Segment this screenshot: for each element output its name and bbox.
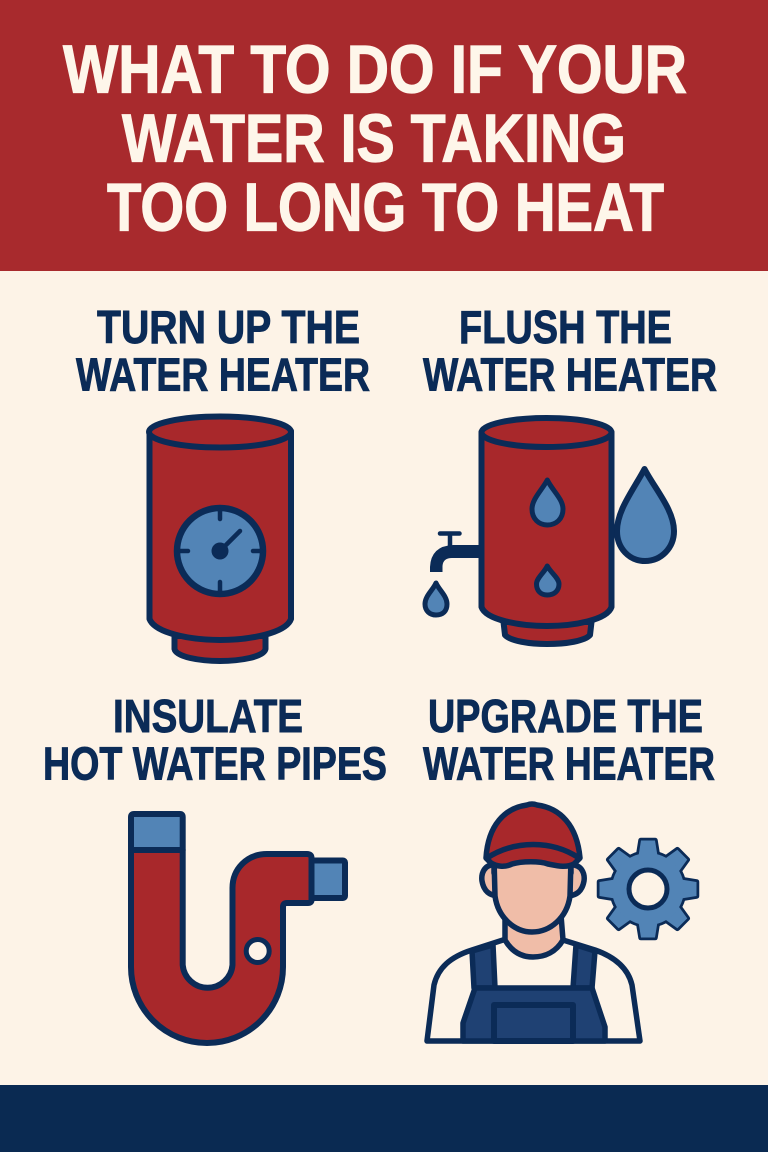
right pipe cap [311, 860, 345, 898]
heading: insulate hot water pipes: INSULATE [113, 690, 303, 742]
icon: upper drop [532, 480, 563, 525]
neck [505, 915, 563, 957]
ears [482, 865, 497, 896]
overalls [463, 945, 605, 1041]
pipe hole [246, 940, 269, 962]
icon: insulated pipe [131, 814, 345, 1043]
cap [486, 804, 580, 866]
icon: lower drop [536, 566, 559, 595]
heading: upgrade the water heater [423, 690, 715, 790]
heading: insulate hot water pipes: HOT WATER PIPES [43, 738, 387, 790]
ear tabs [494, 866, 571, 873]
title: WATER IS TAKING [122, 100, 626, 176]
icon: faucet [430, 534, 483, 572]
torso and shirt [427, 940, 640, 1041]
heading: flush the water heater [423, 301, 717, 400]
icon: gear [600, 840, 696, 938]
heading: turn up the water heater: WATER HEATER [76, 348, 370, 400]
icon: water heater being flushed [425, 418, 674, 644]
header banner [0, 0, 768, 271]
title: WHAT TO DO IF YOUR [63, 32, 687, 108]
heading: turn up the water heater [76, 301, 370, 400]
footer band [0, 1085, 768, 1152]
heading: upgrade the water heater: UPGRADE THE [428, 690, 703, 742]
icon: technician [427, 804, 640, 1041]
title: TOO LONG TO HEAT [107, 170, 664, 246]
heading: turn up the water heater: TURN UP THE [97, 301, 360, 353]
icon: falling drop [425, 583, 447, 615]
face [494, 858, 571, 932]
icon: water heater with gauge [149, 416, 291, 661]
heading: flush the water heater: FLUSH THE [459, 301, 672, 353]
title [63, 32, 687, 246]
icon: temperature gauge [177, 508, 263, 594]
heading: insulate hot water pipes [43, 690, 387, 790]
top pipe cap [131, 814, 183, 850]
icon: large water drop [617, 469, 674, 561]
